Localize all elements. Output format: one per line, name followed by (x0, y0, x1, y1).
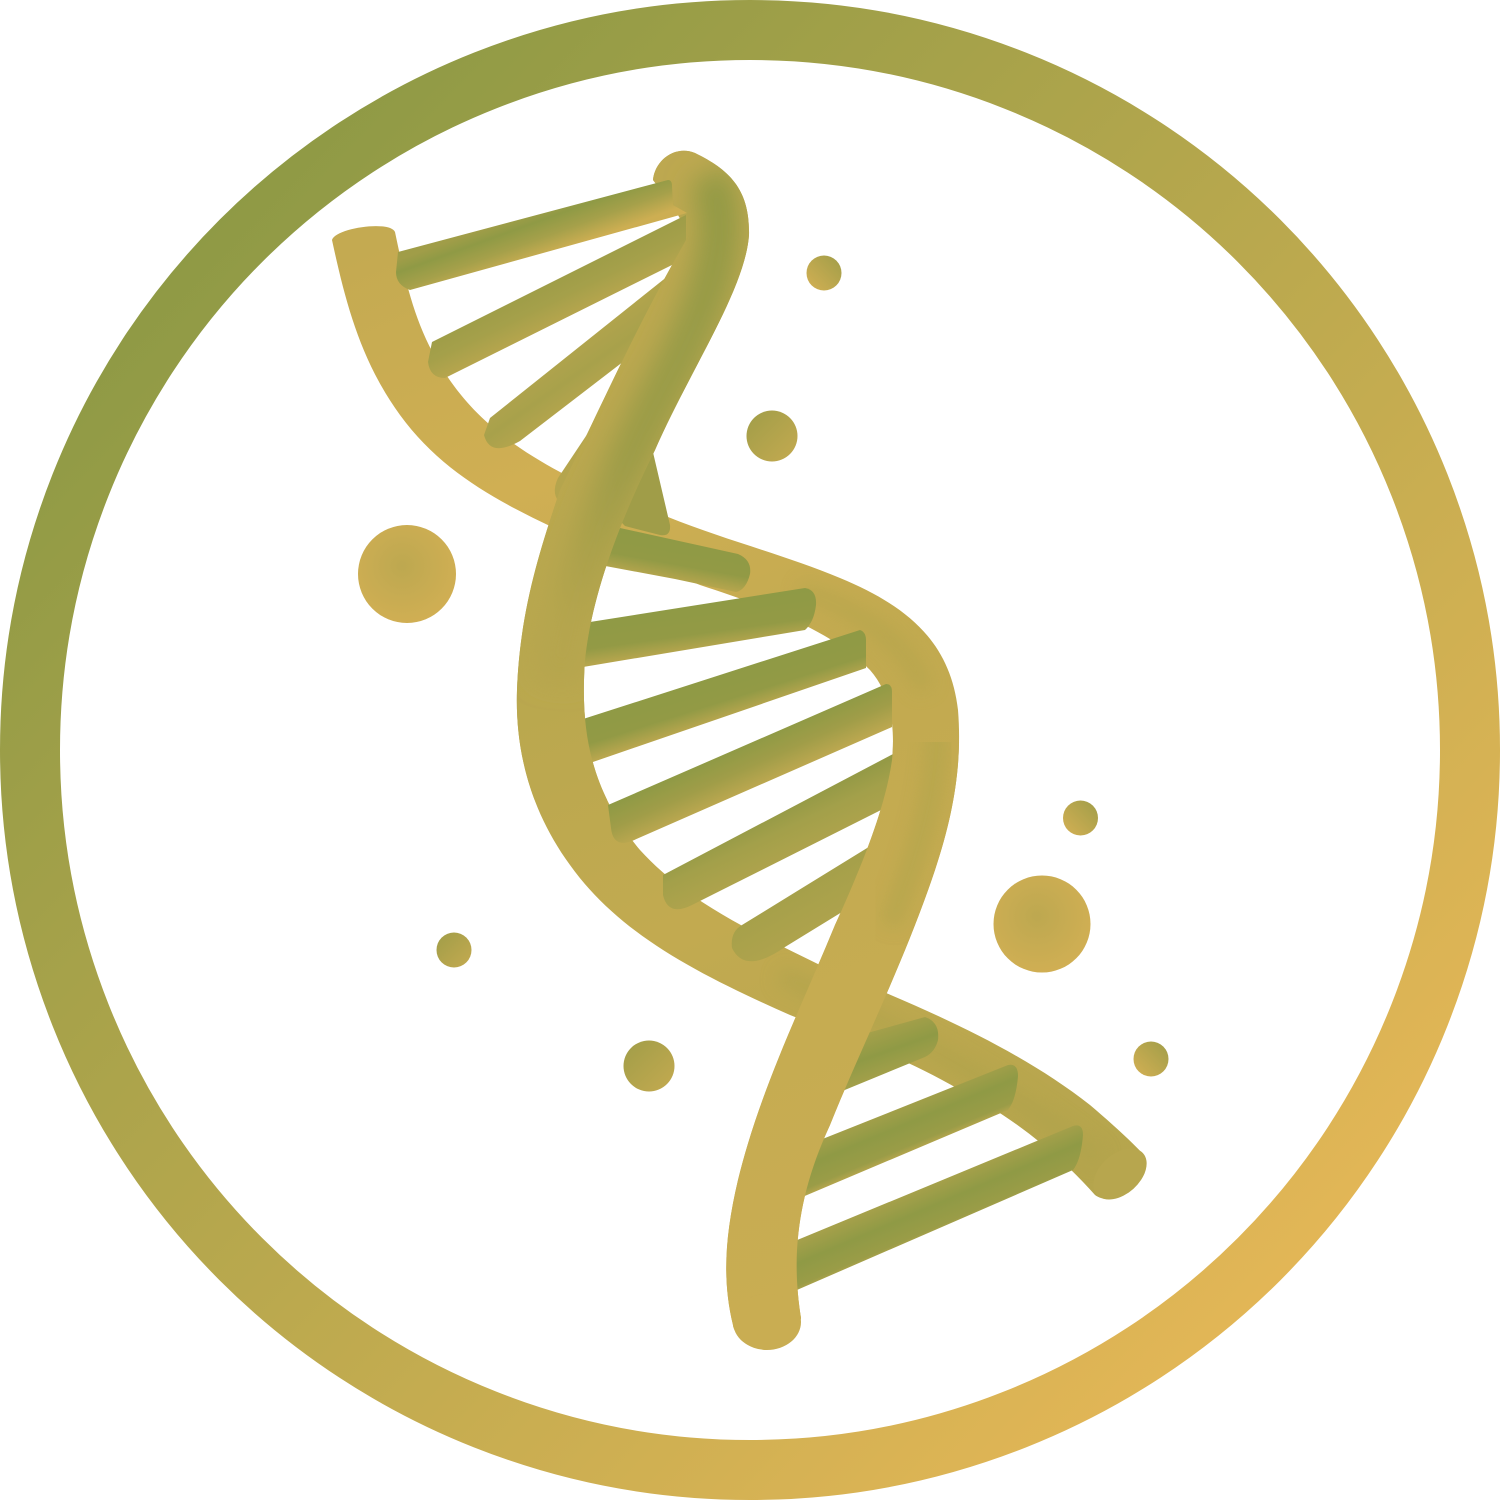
rung 10 (732, 845, 872, 961)
dot 7 (436, 932, 472, 968)
rung 8 (608, 684, 892, 843)
rung 13 (790, 1125, 1083, 1293)
dot 8 (624, 1040, 674, 1092)
rung 11 (835, 1017, 938, 1094)
rung 7 (580, 630, 866, 763)
dot 3 (358, 525, 456, 623)
strand B green shading (558, 175, 720, 680)
strand end cap: right (1084, 1138, 1156, 1210)
rung 12 (800, 1065, 1018, 1198)
strand A right shading (890, 700, 937, 925)
back strand B (517, 151, 1146, 1199)
dot 1 (806, 256, 842, 290)
rung 1 (396, 180, 687, 290)
rung 6 (583, 588, 816, 667)
base pair rungs behind the front strands (484, 268, 1083, 1293)
rung 2 (428, 215, 686, 378)
dot 6 (1134, 1042, 1168, 1076)
rung 4 lower (600, 448, 670, 535)
front strand B upper (516, 150, 750, 800)
front strand A lower (726, 742, 960, 1330)
rung 3 (484, 268, 678, 448)
dot 5 (994, 876, 1090, 972)
strand end cap: bottom (733, 1294, 801, 1350)
back strand A (332, 226, 959, 1345)
rung 5 (600, 528, 750, 592)
dot 2 (746, 410, 798, 462)
rung 9 (663, 753, 895, 909)
molecule dots (358, 256, 1168, 1092)
dot 4 (1063, 800, 1098, 836)
rung 4 upper (555, 430, 600, 505)
